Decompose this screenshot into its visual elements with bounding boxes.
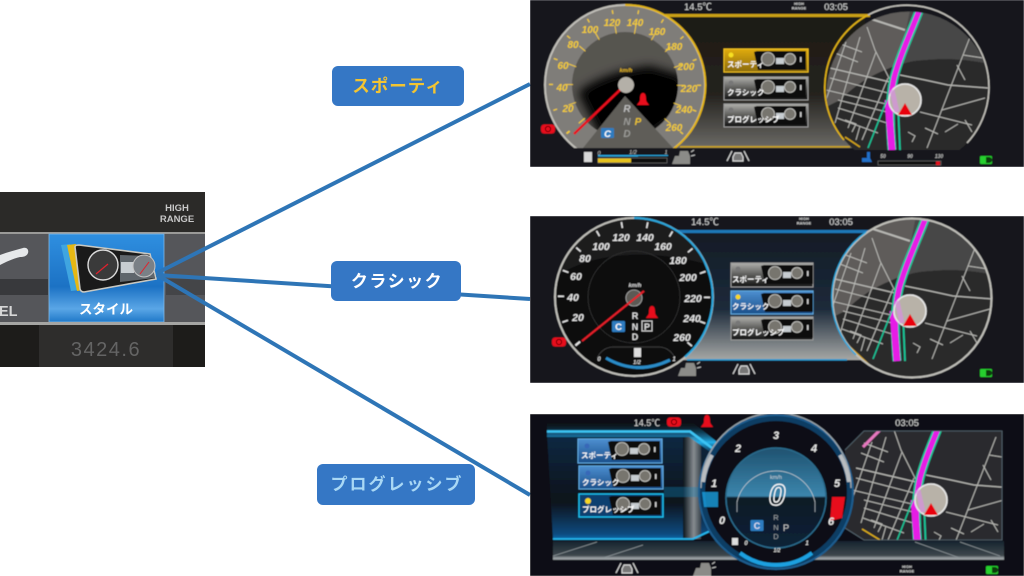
speedometer: 40 (555, 83, 568, 94)
speedometer: 20 (571, 312, 584, 324)
label: classic: クラシック (351, 272, 443, 291)
speedometer: P (635, 117, 642, 128)
panel: sporty dashboard (530, 0, 1024, 167)
speedometer: 80 (579, 253, 591, 265)
warning and status icons (616, 415, 998, 576)
tachometer: 4 (810, 443, 817, 455)
tachometer: km/h (770, 475, 782, 481)
button label: スタイル (79, 302, 133, 317)
speedometer: R (632, 311, 639, 321)
header readouts: HIGH (794, 1, 804, 6)
tachometer: N (773, 523, 779, 532)
label: classic (331, 261, 461, 301)
header readouts (634, 418, 919, 574)
speedometer: 160 (649, 27, 666, 38)
selected style button (49, 234, 164, 322)
style selector cards: スポーティ (581, 451, 618, 460)
label: sporty (332, 66, 464, 106)
label: progressive: プログレッシブ (330, 474, 464, 494)
speedometer: 220 (680, 84, 698, 95)
tachometer: 5 (834, 478, 841, 490)
fuel and assist status row: 1 (664, 150, 668, 156)
tachometer: 6 (828, 516, 835, 528)
speedometer: 140 (627, 18, 644, 29)
tachometer: 1/2 (774, 548, 781, 554)
speedometer: 100 (592, 241, 610, 253)
fuel and assist status row: 0 (597, 151, 601, 157)
speedometer: 40 (566, 292, 579, 304)
header readouts: RANGE (900, 568, 915, 574)
label: progressive (317, 464, 475, 505)
speedometer: 1 (672, 357, 676, 363)
needle (574, 88, 622, 134)
speedometer: 180 (669, 255, 687, 267)
speedometer: C (604, 129, 611, 140)
speedometer: 60 (570, 271, 582, 283)
speedometer: 200 (677, 62, 695, 73)
style selector cards: クラシック (582, 477, 619, 487)
status icons (678, 362, 992, 377)
fuel and assist status row: 90 (907, 154, 913, 160)
speedometer: 260 (672, 332, 691, 344)
style selector cards: スポーティ (727, 60, 764, 69)
header readouts: 14.5℃ (684, 2, 712, 13)
header readouts: RANGE (792, 6, 807, 10)
speedometer: km/h (629, 283, 642, 289)
high range label: RANGE (160, 214, 194, 225)
header readouts: RANGE (797, 220, 812, 226)
icon: parking brake (541, 124, 555, 134)
tachometer: 0 (769, 479, 786, 512)
header readouts: 03:05 (829, 217, 853, 228)
speedometer: N (632, 322, 638, 332)
speedometer: 260 (665, 123, 683, 134)
header readouts: HIGH (799, 216, 809, 221)
speedometer: 180 (666, 42, 683, 53)
header readouts: 14.5℃ (691, 217, 719, 228)
header readouts: 03:05 (824, 2, 848, 13)
speedometer: 80 (567, 40, 579, 51)
speedometer: R (623, 104, 631, 115)
tachometer: 0 (719, 515, 726, 527)
fuel and assist status row: 130 (935, 154, 943, 160)
navigation map (826, 11, 988, 151)
style selector cards: プログレッシブ (582, 504, 635, 514)
panel: classic dashboard (530, 216, 1024, 383)
speedometer: 120 (612, 232, 630, 244)
header readouts: 03:05 (895, 418, 919, 429)
speedometer: D (623, 129, 631, 140)
speedometer: 0 (597, 357, 601, 363)
speedometer: 240 (682, 313, 701, 325)
navigation map (833, 219, 991, 376)
tachometer: 2 (734, 443, 741, 455)
header readouts (690, 216, 854, 226)
tachometer: 3 (773, 430, 779, 442)
panel: style menu screen (0, 192, 205, 367)
speedometer: 160 (654, 241, 672, 253)
style selector cards: クラシック (732, 301, 769, 311)
header readouts (684, 2, 848, 12)
style selector cards (731, 263, 813, 340)
tachometer: P (783, 523, 789, 534)
tachometer: 0 (744, 541, 748, 547)
fuel and assist status row: 1/2 (629, 150, 637, 156)
style selector cards: プログレッシブ (732, 327, 785, 337)
style selector cards: クラシック (727, 87, 764, 97)
style selector cards: プログレッシブ (727, 114, 780, 124)
icon: dashboard style cards (61, 244, 156, 292)
speedometer: km/h (620, 68, 633, 74)
speedometer (543, 3, 708, 149)
speedometer: 140 (636, 232, 654, 244)
tachometer: 1 (711, 478, 717, 490)
odometer value: 3424.6 (71, 339, 141, 361)
panel: progressive dashboard (530, 406, 1024, 576)
speedometer: C (615, 322, 622, 333)
tachometer: 1 (805, 541, 809, 547)
style selector cards: スポーティ (732, 275, 769, 284)
map (844, 430, 1002, 541)
speedometer: N (623, 117, 631, 128)
fuel and assist status row: 50 (880, 154, 886, 160)
label: sporty: スポーティ (352, 76, 444, 96)
speedometer (553, 216, 715, 378)
speedometer: 60 (557, 61, 569, 72)
speedometer: 1/2 (633, 360, 641, 366)
tachometer: R (773, 513, 779, 522)
speedometer: 100 (582, 25, 599, 36)
speedometer: 20 (561, 104, 574, 115)
header readouts: HIGH (902, 564, 912, 569)
tachometer: C (754, 521, 761, 531)
style selector cards (578, 439, 663, 517)
header readouts: 14.5℃ (634, 418, 660, 428)
speedometer: D (632, 332, 639, 342)
speedometer: 220 (683, 293, 702, 305)
blue frame band (547, 422, 1004, 560)
speedometer: 200 (678, 272, 697, 284)
icon: steering handle (0, 248, 28, 265)
icon: parking brake (552, 338, 566, 346)
speedometer: 120 (604, 18, 621, 29)
speedometer: 240 (675, 105, 693, 116)
high range label: HIGH (165, 203, 189, 214)
connector lines (157, 84, 530, 495)
tachometer: D (773, 532, 779, 541)
fuel and assist status row (584, 150, 992, 165)
speedometer: P (644, 322, 650, 332)
style selector cards (724, 49, 808, 127)
tachometer (699, 413, 853, 569)
